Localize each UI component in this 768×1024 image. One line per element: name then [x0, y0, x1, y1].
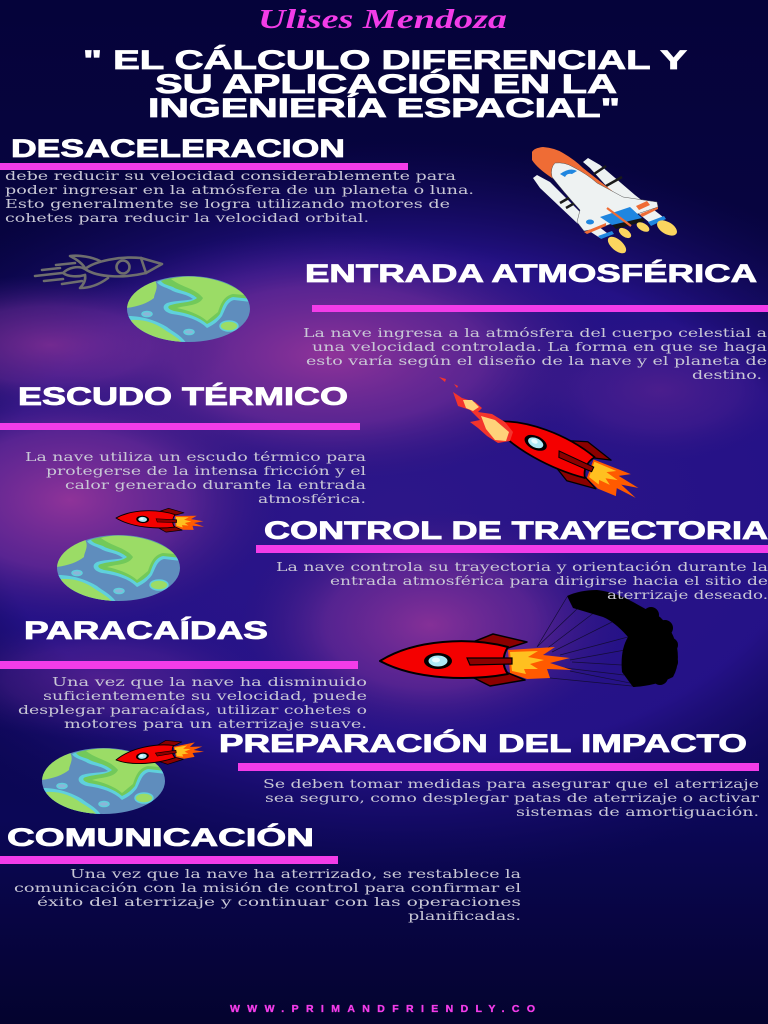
title: SU APLICACIÓN EN LA [155, 68, 617, 99]
body text [18, 674, 367, 731]
body text: Esto generalmente se logra utilizando motores de [5, 196, 450, 211]
heading: DESACELERACION [11, 135, 345, 163]
heading: PARACAÍDAS [24, 616, 268, 645]
body text: calor generado durante la entrada [65, 477, 367, 492]
heading: ESCUDO TÉRMICO [18, 382, 348, 411]
title: " EL CÁLCULO DIFERENCIAL Y [83, 44, 687, 75]
body text: destino. [692, 367, 762, 382]
body text: entrada atmosférica para dirigirse hacia el sitio de [330, 573, 768, 588]
icon: planet 2 with small rocket [56, 506, 205, 605]
icon: outline rocket [35, 256, 162, 288]
body text: una velocidad controlada. La forma en que se haga [312, 339, 768, 354]
body text: atmosférica. [258, 491, 366, 506]
title: INGENIERÍA ESPACIAL" [148, 92, 620, 123]
panel: paracaidas [0, 616, 367, 731]
panel: preparacion del impacto [219, 728, 759, 819]
heading: PREPARACIÓN DEL IMPACTO [219, 728, 747, 758]
body text: cohetes para reducir la velocidad orbital. [5, 210, 369, 225]
body text: Una vez que la nave ha aterrizado, se restablece la [70, 866, 522, 881]
body text: debe reducir su velocidad considerablemente para [5, 168, 457, 183]
author name: Ulises Mendoza [258, 4, 507, 34]
body text: esto varía según el diseño de la nave y el planeta de [306, 353, 767, 368]
panel: comunicacion [0, 822, 522, 923]
body text: Una vez que la nave ha disminuido [52, 674, 367, 689]
panel: escudo termico [0, 382, 367, 506]
body text [14, 866, 522, 923]
heading: CONTROL DE TRAYECTORIA [264, 517, 768, 545]
body text [303, 325, 768, 382]
body text: éxito del aterrizaje y continuar con las operaciones [37, 894, 521, 909]
body text: motores para un aterrizaje suave. [64, 716, 367, 731]
icon: parachute [537, 590, 678, 687]
heading: COMUNICACIÓN [7, 822, 314, 852]
body text: desplegar paracaídas, utilizar cohetes o [18, 702, 367, 717]
body text [263, 776, 759, 819]
body text: sea seguro, como desplegar patas de aterrizaje o activar [265, 790, 759, 805]
panel: entrada atmosferica [303, 259, 768, 382]
body text: aterrizaje deseado. [607, 587, 768, 602]
body text [5, 168, 474, 225]
icon: space shuttle [532, 147, 680, 256]
panel: desaceleracion [0, 135, 474, 225]
icon: red rocket with nose fire [439, 377, 649, 510]
body text: La nave utiliza un escudo térmico para [25, 449, 367, 464]
body text: comunicación con la misión de control para confirmar el [14, 880, 521, 895]
heading: ENTRADA ATMOSFÉRICA [305, 259, 757, 288]
body text: Se deben tomar medidas para asegurar que el aterrizaje [263, 776, 759, 791]
icon: planet 3 with small rocket [41, 735, 205, 818]
body text: sistemas de amortiguación. [516, 804, 759, 819]
footer url: WWW.PRIMANDFRIENDLY.CO [230, 1003, 535, 1015]
body text: protegerse de la intensa fricción y el [46, 463, 366, 478]
body text: suficientemente su velocidad, puede [43, 688, 367, 703]
panel: control de trayectoria [256, 517, 768, 602]
body text [25, 449, 367, 506]
body text: La nave controla su trayectoria y orientación durante la [276, 559, 768, 574]
body text: poder ingresar en la atmósfera de un planeta o luna. [5, 182, 474, 197]
icon: planet 1 [126, 276, 251, 346]
body text [276, 559, 768, 602]
body text: La nave ingresa a la atmósfera del cuerpo celestial a [303, 325, 768, 340]
title [83, 44, 687, 123]
body text: planificadas. [408, 908, 521, 923]
icon: red rocket with parachute [380, 634, 572, 686]
